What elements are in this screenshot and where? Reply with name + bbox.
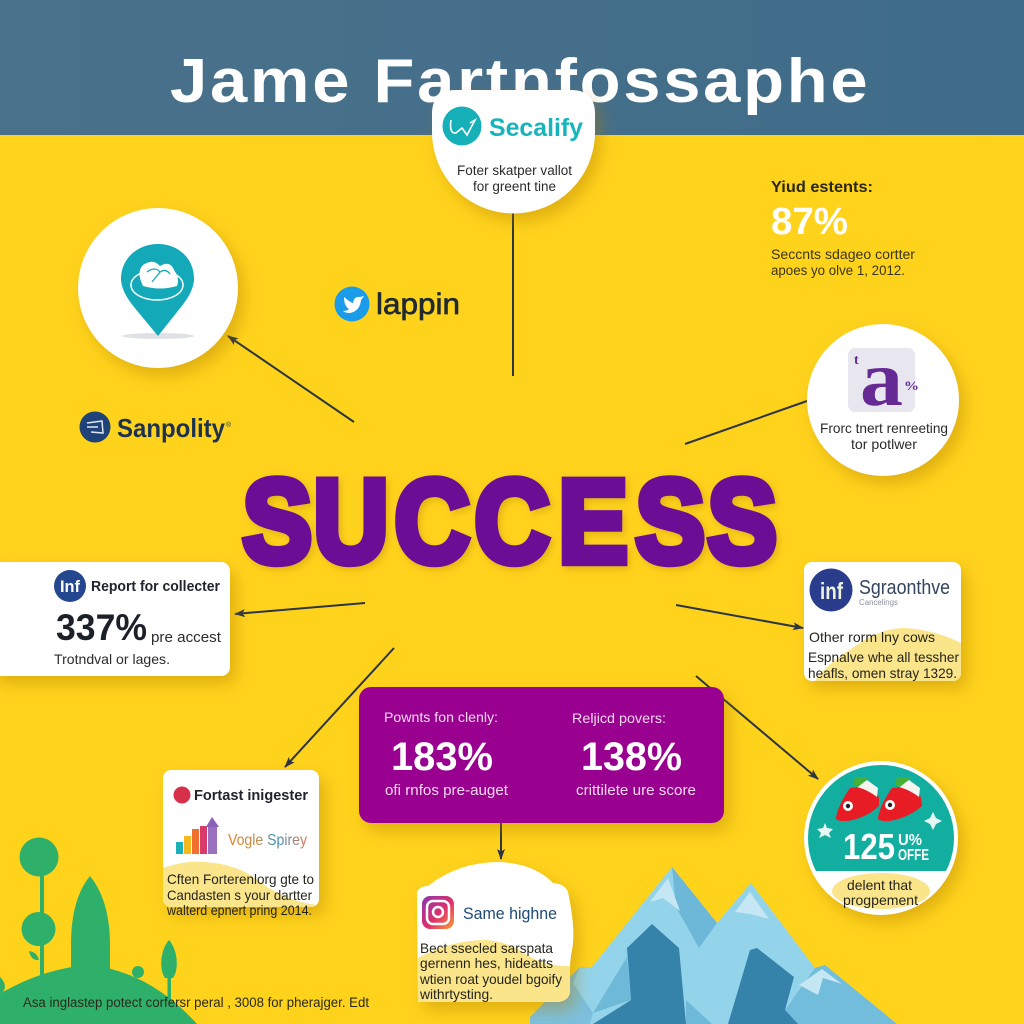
card: Report for collecter: Report for collecter xyxy=(91,579,220,595)
card: discount circle xyxy=(800,760,962,915)
card: Sgraonthve: Espnalve whe all tessher xyxy=(808,649,959,665)
stat: 87%: Seccnts sdageo cortter xyxy=(771,247,916,262)
panel: purple stats: crittilete ure score xyxy=(576,783,696,799)
stat: 87%: Yiud estents: xyxy=(771,179,873,196)
card: Report for collecter: 337% xyxy=(56,607,147,648)
card: discount circle: delent that xyxy=(847,877,912,893)
icon: Inf badge: Inf xyxy=(60,577,80,596)
card: Report for collecter: pre accest xyxy=(151,630,221,646)
Secalify name: Secalify xyxy=(489,114,583,142)
card: Fortast inigester: Cften Forterenlorg gte to xyxy=(167,871,314,887)
mountains illustration xyxy=(530,867,897,1024)
panel: purple stats: 138% xyxy=(581,735,682,779)
panel: purple stats: ofi rnfos pre-auget xyxy=(385,783,508,799)
card: letter a circle xyxy=(807,324,959,476)
hills and trees illustration xyxy=(0,838,197,1024)
chart: mini bars xyxy=(176,817,219,854)
header band xyxy=(0,0,1024,135)
Secalify description: for greent tine xyxy=(473,179,556,194)
card: Same highne xyxy=(417,862,573,1002)
icon: Inf badge xyxy=(54,570,86,602)
logo: Sanpolity: ® xyxy=(226,421,232,429)
card: Secalify xyxy=(432,90,595,214)
Secalify description xyxy=(457,163,572,194)
panel: purple stats: Pownts fon clenly: xyxy=(384,709,498,725)
card: Same highne: wtien roat youdel bgoify xyxy=(419,971,562,987)
card: Same highne: gernenn hes, hideatts xyxy=(420,955,553,971)
title: Jame Fartnfossaphe xyxy=(170,46,868,115)
footer note: Asa inglastep potect corfersr peral , 3008 for pherajger. Edt xyxy=(23,995,369,1010)
card: discount circle: U% xyxy=(898,832,922,849)
card: Report for collecter: Trotndval or lages. xyxy=(54,651,170,667)
card: Fortast inigester: Candasten s your dartter xyxy=(167,887,312,903)
card: Sgraonthve: Other rorm lny cows xyxy=(809,629,935,645)
main heading: SUCCESS: SUCCESS xyxy=(243,455,777,587)
card: Sgraonthve: inf xyxy=(820,578,843,604)
card: Same highne: Same highne xyxy=(463,905,557,923)
logo: lappin: lappin xyxy=(376,288,460,321)
stat: 87%: 87% xyxy=(771,201,848,243)
card: location pin circle xyxy=(78,208,238,368)
icon: Secalify logo xyxy=(442,106,482,146)
stat: 87% xyxy=(771,179,916,278)
card: discount circle: 125 xyxy=(843,826,895,867)
card: Sgraonthve: Sgraonthve xyxy=(859,577,950,599)
card: letter a circle: Frorc tnert renreeting xyxy=(820,420,948,436)
card: Fortast inigester: Vogle Spirey xyxy=(228,832,307,849)
card: letter a circle: tor potlwer xyxy=(851,436,917,452)
logo: Sanpolity: Sanpolity xyxy=(117,413,225,443)
card: Sgraonthve: Cancelings xyxy=(859,598,898,607)
panel: purple stats: Reljicd povers: xyxy=(572,710,666,726)
card: letter a circle: a xyxy=(860,335,903,422)
card: letter a circle: % xyxy=(904,378,919,393)
card: Fortast inigester xyxy=(163,770,319,918)
Secalify description: Foter skatper vallot xyxy=(457,163,572,178)
logo: lappin xyxy=(334,286,460,322)
card: discount circle: progpement xyxy=(843,892,918,908)
card: Report for collecter xyxy=(0,562,230,676)
panel: purple stats xyxy=(359,687,724,823)
card: Fortast inigester: Fortast inigester xyxy=(194,787,308,804)
stat: 87%: apoes yo olve 1, 2012. xyxy=(771,263,905,278)
card: Sgraonthve: heafls, omen stray 1329. xyxy=(808,665,957,681)
card: Same highne: Bect ssecled sarspata xyxy=(420,940,553,956)
card: discount circle: OFFE xyxy=(898,847,929,864)
panel: purple stats: 183% xyxy=(391,735,493,779)
card: letter a circle: t xyxy=(854,353,859,368)
connector lines and arrows xyxy=(228,205,818,859)
card: Fortast inigester: walterd epnert pring 2014. xyxy=(166,902,312,918)
icon: Instagram xyxy=(422,896,454,929)
card: Same highne: withrtysting. xyxy=(419,986,493,1002)
card: Sgraonthve xyxy=(804,562,961,681)
